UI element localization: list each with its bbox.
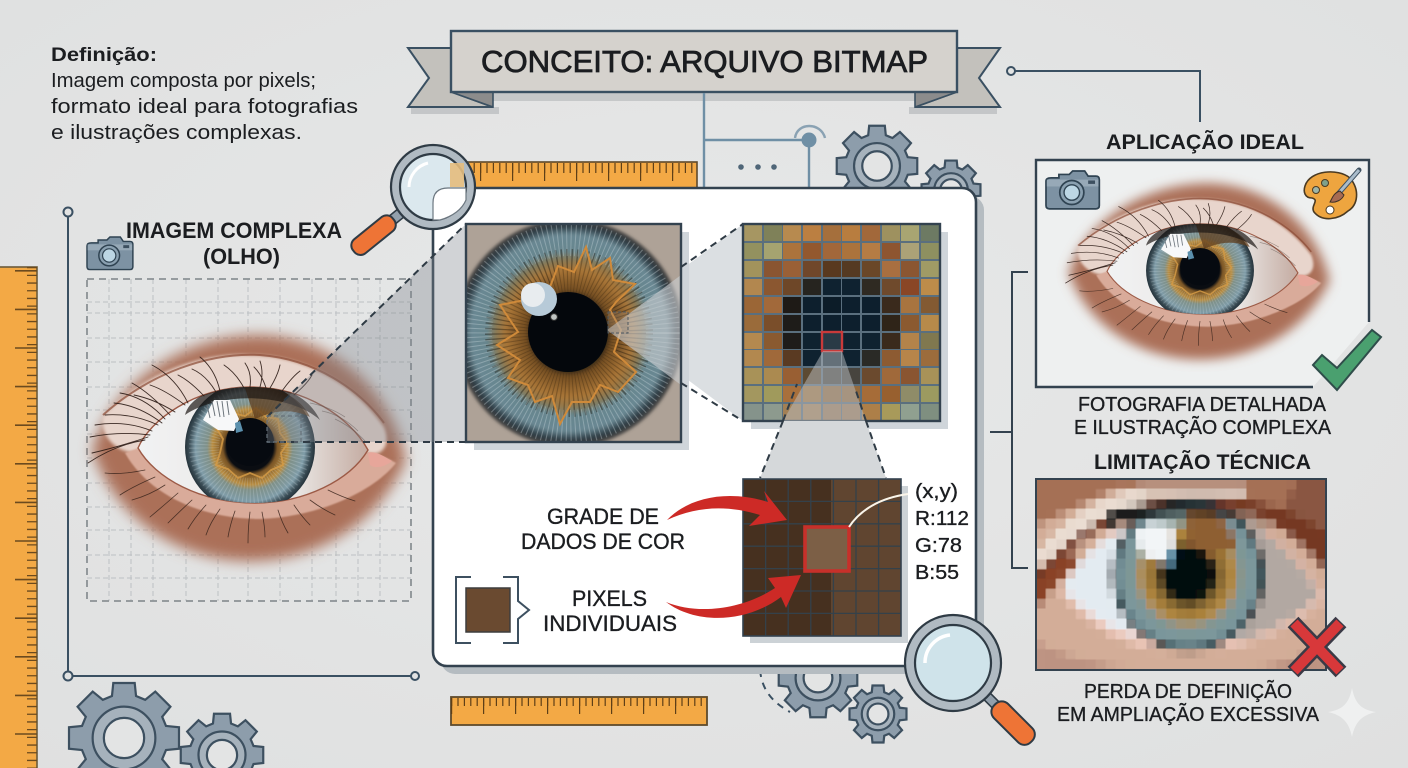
right bracket connector bbox=[990, 272, 1028, 568]
connector network with sensor bbox=[704, 93, 825, 190]
left connector line bbox=[64, 208, 419, 680]
label: imagem complexa bbox=[126, 218, 342, 269]
icon: camera left bbox=[87, 237, 133, 270]
label: imagem complexa: IMAGEM COMPLEXA bbox=[126, 218, 342, 243]
zoom wedge from eye to iris bbox=[267, 224, 466, 442]
title banner bbox=[408, 31, 1000, 114]
label: imagem complexa: (OLHO) bbox=[203, 244, 280, 269]
panel: iris close-up bbox=[455, 219, 743, 450]
caption: perda de definição: EM AMPLIAÇÃO EXCESSIVA bbox=[1057, 703, 1319, 726]
definition text: e ilustrações complexas. bbox=[51, 122, 302, 144]
bottom ruler bbox=[451, 697, 707, 725]
label: pixels individuais bbox=[543, 586, 677, 636]
zoom wedge from iris to grid bbox=[625, 224, 743, 421]
pixel values: B:55 bbox=[915, 561, 959, 584]
zoom wedge from pixel to detail bbox=[760, 351, 886, 478]
label: grade de dados de cor: GRADE DE bbox=[547, 504, 659, 529]
pixel values: (x,y) bbox=[915, 481, 958, 503]
caption: fotografia detalhada: FOTOGRAFIA DETALHADA bbox=[1078, 393, 1326, 416]
caption: perda de definição bbox=[1057, 680, 1319, 726]
pixel values: R:112 bbox=[915, 507, 969, 530]
definition text: Definição: bbox=[51, 44, 157, 66]
top right connector bbox=[1007, 67, 1200, 122]
panel: detail pixel grid bbox=[743, 479, 908, 643]
arrow: grade to grid bbox=[667, 491, 787, 526]
label: pixels individuais: PIXELS bbox=[572, 586, 647, 611]
label: pixels individuais: INDIVIDUAIS bbox=[543, 611, 677, 636]
label: grade de dados de cor: DADOS DE COR bbox=[521, 529, 685, 554]
pixel values bbox=[915, 481, 969, 584]
label: grade de dados de cor bbox=[521, 504, 685, 554]
heading: limitação técnica: LIMITAÇÃO TÉCNICA bbox=[1094, 449, 1311, 474]
pixel values: G:78 bbox=[915, 534, 962, 557]
icon: single pixel bracket bbox=[456, 577, 529, 643]
arrow: pixels to grid bbox=[666, 575, 801, 618]
eye illustration bbox=[88, 335, 406, 561]
definition text bbox=[51, 44, 358, 144]
caption: fotografia detalhada: E ILUSTRAÇÃO COMPLEXA bbox=[1074, 416, 1331, 439]
white central panel bbox=[433, 188, 984, 674]
icon: red cross bbox=[1293, 622, 1341, 672]
dashed pixel grid behind the eye bbox=[87, 279, 411, 601]
top ruler bbox=[448, 162, 697, 190]
bottom left gears bbox=[69, 683, 263, 768]
icon: magnifier bottom bbox=[905, 615, 1039, 749]
heading: aplicação ideal: APLICAÇÃO IDEAL bbox=[1106, 129, 1304, 154]
definition text: formato ideal para fotografias bbox=[51, 96, 358, 118]
top gears bbox=[837, 126, 980, 219]
caption: perda de definição: PERDA DE DEFINIÇÃO bbox=[1084, 680, 1292, 703]
icon: green check bbox=[1313, 330, 1381, 390]
definition text: Imagem composta por pixels; bbox=[51, 70, 316, 92]
panel: aplicação ideal bbox=[1036, 160, 1369, 387]
left ruler bbox=[0, 267, 37, 768]
icon: magnifier top bbox=[348, 145, 475, 258]
bottom gears bbox=[760, 639, 906, 742]
caption: fotografia detalhada bbox=[1074, 393, 1331, 439]
title banner: CONCEITO: ARQUIVO BITMAP bbox=[481, 44, 928, 79]
panel: pixelated eye bbox=[1030, 473, 1332, 677]
icon: sparkle bbox=[1328, 688, 1376, 737]
panel: pixel grid of the iris bbox=[743, 224, 948, 429]
